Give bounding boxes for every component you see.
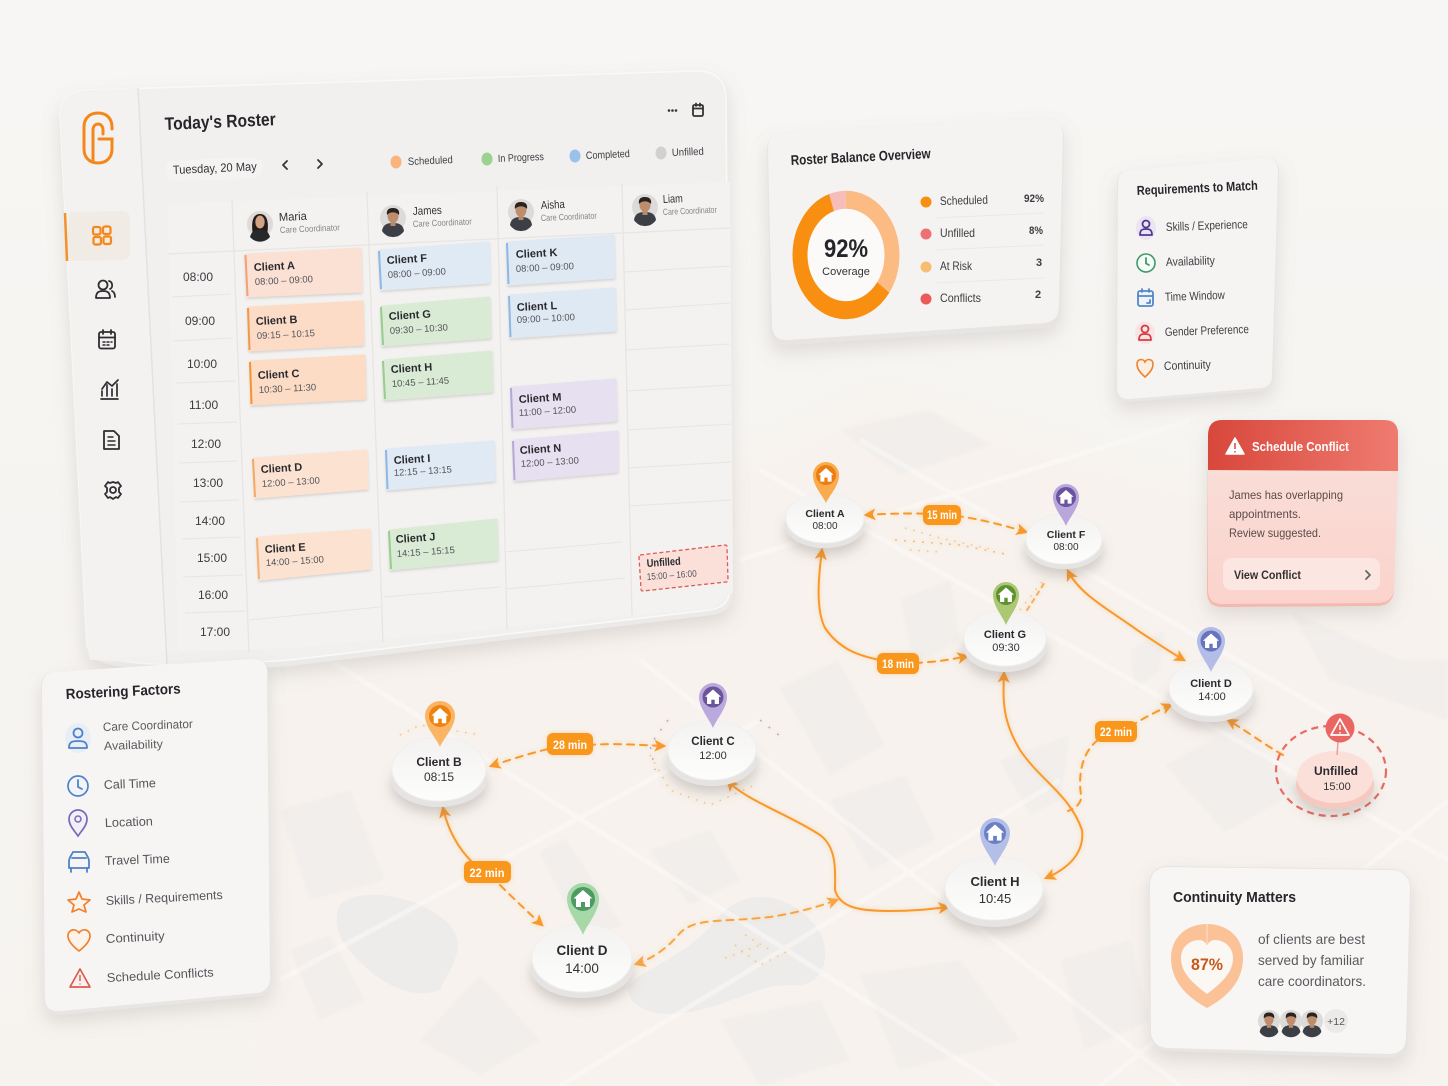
route H-D (1068, 705, 1171, 811)
event: Client F: 08:00 – 09:00 (388, 266, 446, 281)
icon: people (96, 280, 115, 298)
scatter dots (400, 528, 1045, 965)
panel: continuity matters (1149, 866, 1411, 1058)
time labels: 13:00 (193, 476, 223, 490)
node: Client C: 12:00 (699, 750, 727, 762)
event: Client H: 10:45 – 11:45 (392, 376, 449, 390)
schedule grid (168, 182, 733, 652)
node: Client F: 08:00 (1053, 542, 1079, 553)
donut chart: Coverage (822, 266, 870, 278)
event: Client L: Client L (517, 300, 558, 314)
balance legend: Unfilled (940, 226, 975, 240)
coordinator: James: Care Coordinator (413, 216, 472, 229)
conflict message: appointments. (1229, 507, 1301, 521)
heading: Continuity Matters (1173, 889, 1296, 906)
heart gauge: 87% (1191, 955, 1223, 974)
event: Client D (253, 451, 367, 497)
node: Client B: 08:15 (424, 770, 454, 784)
factor: travel time: Travel Time (105, 852, 170, 868)
event: Client N: Client N (519, 442, 562, 457)
donut chart: 92% (824, 235, 868, 263)
status legend: Scheduled (408, 154, 453, 168)
event: Client G (381, 298, 490, 345)
balance legend: 8% (1029, 225, 1043, 237)
event: Client E: 14:00 – 15:00 (266, 554, 324, 569)
node: Client A (785, 462, 865, 548)
node: Client G: 09:30 (992, 642, 1020, 654)
coordinator: Maria: Maria (279, 211, 308, 224)
panel: roster balance overview (767, 119, 1064, 345)
event: Client F: Client F (386, 253, 428, 267)
continuity description: of clients are best (1258, 931, 1365, 947)
node: Client B (391, 701, 487, 807)
time labels: 17:00 (200, 625, 230, 639)
item: skills (1136, 216, 1248, 240)
pin (993, 582, 1019, 625)
factor: schedule conflicts (70, 965, 214, 987)
event: Client B: Client B (256, 314, 298, 328)
pin (1053, 484, 1079, 526)
coordinator: Aisha (508, 199, 597, 231)
node: Client G: Client G (984, 629, 1026, 641)
event: Client L: 09:00 – 10:00 (517, 312, 575, 326)
date selector (166, 157, 322, 181)
heart gauge (1171, 924, 1243, 1008)
node: Unfilled: 15:00 (1323, 781, 1351, 793)
factor: call time: Call Time (104, 776, 156, 792)
map base (250, 395, 1448, 1086)
node: Client D right: Client D (1190, 678, 1232, 690)
route D-H (636, 900, 837, 964)
node: Client D lower: 14:00 (565, 961, 599, 976)
node: Client H (944, 818, 1044, 927)
event: Client J (389, 520, 497, 569)
coordinator: Liam (632, 193, 717, 226)
node: Client H: Client H (970, 874, 1020, 889)
time labels (183, 270, 230, 639)
toolbar icons (668, 104, 703, 116)
dashboard panel (60, 71, 733, 670)
coordinator: Liam: Care Coordinator (663, 205, 717, 217)
balance legend: At Risk (940, 259, 973, 273)
event: Client N (513, 432, 617, 480)
conflict message (1229, 488, 1343, 540)
factor: skills / requirements (68, 888, 223, 912)
conflict message: Review suggested. (1229, 526, 1321, 540)
event: Client K: 08:00 – 09:00 (516, 261, 574, 275)
pin (699, 683, 727, 728)
route C-H (728, 781, 948, 911)
factor: location (69, 810, 153, 836)
balance legend: Conflicts (940, 291, 981, 305)
item: time window (1138, 288, 1225, 306)
event: Client A: 08:00 – 09:00 (255, 274, 313, 288)
event: Client C: 10:30 – 11:30 (259, 382, 316, 396)
event: Unfilled: 15:00 – 16:00 (646, 569, 697, 583)
status legend: In Progress (498, 151, 544, 165)
label: 15 min: 15 min (927, 510, 957, 522)
coordinator: Maria: Care Coordinator (280, 222, 340, 235)
node: Client B: Client B (416, 755, 462, 769)
node: Client D right: 14:00 (1198, 691, 1226, 703)
route A-G (819, 550, 967, 663)
item: continuity: Continuity (1164, 357, 1211, 373)
status legend: Unfilled (672, 146, 704, 159)
pin (980, 818, 1010, 866)
balance legend: 3 (1036, 257, 1042, 269)
column headers (247, 193, 717, 242)
time labels: 12:00 (191, 437, 221, 451)
conflict message: James has overlapping (1229, 488, 1343, 502)
item: time window: Time Window (1165, 288, 1225, 304)
status legend (390, 146, 704, 168)
item: availability (1137, 253, 1215, 272)
event: Client B: 09:15 – 10:15 (257, 328, 315, 342)
event: Client E (257, 530, 370, 579)
time labels: 14:00 (195, 514, 225, 528)
donut chart (800, 200, 892, 310)
item: gender preference (1135, 322, 1249, 344)
icon: document (104, 431, 119, 449)
time labels: 09:00 (185, 314, 215, 328)
event: Client M (511, 380, 616, 428)
event: Client I: 12:15 – 13:15 (394, 464, 452, 479)
time labels: 16:00 (198, 588, 228, 602)
heading: Requirements to Match (1136, 178, 1258, 198)
date selector: Tuesday, 20 May (173, 159, 257, 177)
label: 18 min: 18 min (882, 659, 914, 671)
label: 22 min left (464, 861, 511, 883)
node: Client G (963, 582, 1047, 672)
factor: skills / requirements: Skills / Requirements (105, 888, 223, 908)
factor: continuity (68, 929, 166, 951)
conflict header: Schedule Conflict (1252, 439, 1350, 454)
balance legend: Scheduled (940, 193, 988, 208)
item: availability: Availability (1166, 253, 1215, 269)
sidebar (60, 88, 167, 664)
factor: call time (68, 776, 156, 796)
event: Client C (250, 356, 365, 404)
continuity description (1258, 931, 1366, 989)
node: Client D right (1168, 627, 1254, 722)
nav active (66, 211, 130, 261)
factor: travel time (69, 852, 170, 872)
node: Unfilled (1276, 714, 1386, 816)
event: Client E: Client E (264, 542, 306, 556)
button: view conflict (1223, 558, 1380, 590)
event: Unfilled: Unfilled (646, 556, 681, 570)
item: skills: Skills / Experience (1166, 217, 1248, 234)
time labels: 08:00 (183, 270, 213, 284)
route network (400, 505, 1283, 965)
balance legend: 2 (1035, 289, 1041, 301)
route G-F (1027, 580, 1046, 610)
pin (567, 883, 599, 935)
status legend: Completed (586, 148, 630, 162)
coordinator: Maria (247, 211, 340, 242)
warning pin (1326, 714, 1354, 755)
panel: rostering factors (41, 659, 272, 1015)
pin (813, 462, 839, 503)
event: Client J: Client J (395, 531, 436, 546)
event: Client K: Client K (516, 247, 558, 261)
heading: Roster Balance Overview (790, 145, 931, 168)
event: Client D: Client D (260, 461, 303, 476)
route F-D (1068, 571, 1184, 660)
event: Client G: 09:30 – 10:30 (390, 322, 448, 337)
label: 28 min: 28 min (553, 740, 587, 752)
icon: chart (101, 380, 118, 399)
event: Client H: Client H (390, 361, 433, 376)
coordinator: Aisha: Care Coordinator (541, 211, 597, 223)
event: Client A: Client A (254, 260, 295, 274)
factor: schedule conflicts: Schedule Conflicts (106, 965, 214, 985)
node: Client D lower: Client D (556, 943, 608, 958)
icon: dashboard grid (93, 226, 111, 244)
label: 22 min right: 22 min (1100, 727, 1132, 739)
factor: care coordinator availability: Availability (104, 737, 163, 753)
event: Client F (379, 243, 489, 289)
coordinator: James: James (413, 205, 442, 218)
icon: calendar (99, 330, 115, 348)
button: view conflict: View Conflict (1234, 568, 1301, 582)
logo (84, 113, 112, 163)
event: Client M: Client M (518, 391, 562, 406)
continuity description: served by familiar (1258, 952, 1364, 968)
balance legend (920, 193, 1045, 305)
event: Client H (383, 352, 492, 399)
factor: location: Location (105, 814, 153, 830)
route A-F (866, 514, 1026, 532)
node: Client H: 10:45 (979, 891, 1011, 906)
label: 15 min (923, 505, 961, 525)
heading: Rostering Factors (65, 681, 181, 703)
event: Client D: 12:00 – 13:00 (262, 475, 320, 490)
lake left (337, 895, 458, 993)
event: Client J: 14:15 – 15:15 (396, 545, 455, 560)
node: Client C (667, 683, 757, 786)
label: 28 min (547, 733, 593, 755)
pin (1197, 627, 1225, 672)
label: 18 min (877, 653, 919, 674)
title: Today's Roster: Today's Roster (164, 109, 276, 134)
node: Client F (1025, 484, 1103, 569)
event: Client M: 11:00 – 12:00 (519, 405, 576, 419)
conflict header (1208, 420, 1398, 471)
balance legend: 92% (1024, 193, 1044, 205)
panel: schedule conflict (1207, 420, 1398, 607)
event: Client A (246, 249, 361, 296)
icon: settings (105, 482, 121, 499)
label: 22 min right (1095, 721, 1137, 742)
event: Client C: Client C (258, 368, 300, 382)
item: gender preference: Gender Preference (1165, 322, 1249, 339)
label: 22 min left: 22 min (470, 868, 504, 880)
event: Client K (507, 236, 614, 284)
route B-D (443, 808, 542, 925)
node: Client A: Client A (805, 508, 845, 520)
factor: care coordinator availability (65, 717, 193, 753)
node: Unfilled: Unfilled (1314, 764, 1358, 778)
factor: continuity: Continuity (105, 929, 166, 946)
pin (425, 701, 455, 747)
lake centre (628, 897, 825, 1014)
coordinator: Liam: Liam (663, 193, 683, 206)
node: Client A: 08:00 (812, 521, 838, 532)
time labels: 15:00 (197, 551, 227, 565)
continuity description: care coordinators. (1258, 973, 1366, 989)
time labels: 10:00 (187, 357, 217, 371)
avatar group: +12 (1327, 1016, 1345, 1028)
avatar group (1258, 1009, 1348, 1037)
factor: care coordinator availability: Care Coordinator (103, 717, 193, 734)
panel: requirements to match (1115, 158, 1279, 402)
item: continuity (1137, 357, 1211, 377)
coordinator: Aisha: Aisha (541, 199, 566, 212)
event: Client I: Client I (393, 453, 431, 467)
event: Client L (509, 289, 615, 337)
event: Client I (386, 442, 494, 489)
event: Client G: Client G (388, 308, 431, 323)
event: Unfilled (639, 545, 728, 591)
time labels: 11:00 (189, 398, 218, 412)
route G-H (1004, 673, 1082, 878)
coordinator: James (380, 205, 472, 237)
node: Client F: Client F (1047, 529, 1086, 541)
event: Client B (248, 302, 363, 350)
node: Client D lower (531, 883, 633, 998)
route B-C (491, 744, 664, 766)
event: Client N: 12:00 – 13:00 (521, 455, 579, 470)
node: Client C: Client C (691, 736, 735, 748)
route unfilled-D (1228, 720, 1283, 755)
